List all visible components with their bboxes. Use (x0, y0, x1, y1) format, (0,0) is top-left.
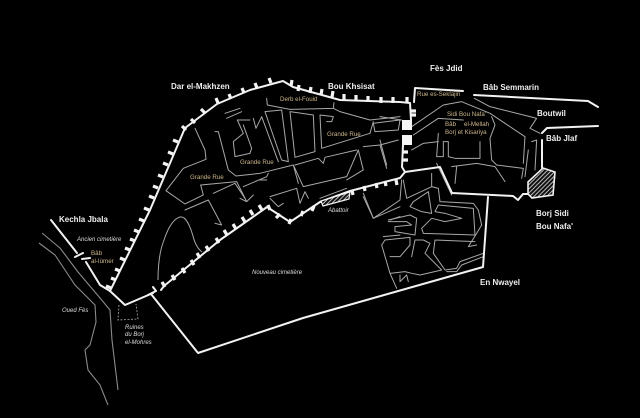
labels: places in italics (62, 208, 350, 346)
labels: districts and gates: Kechla Jbala (59, 215, 108, 224)
labels: places in italics: Ruines (125, 325, 144, 331)
labels: streets: Grande Rue (327, 131, 361, 138)
labels: places in italics: Ancien cimetière (76, 237, 122, 243)
labels: districts and gates: Bou Nafa' (536, 222, 573, 231)
labels: streets: Sidi Bou Nafa' (447, 111, 486, 118)
labels: districts and gates: Fès Jdid (430, 64, 463, 73)
rampart: crenellated south wall (162, 145, 405, 287)
gate: Bab Guissa white blocks (402, 120, 412, 145)
labels: places in italics: du Borj (125, 332, 145, 338)
labels: streets: Rue es-Seklajin (417, 91, 461, 98)
labels: streets: al-Iùmer (91, 258, 114, 265)
labels: streets (91, 91, 490, 265)
streets: south-east quarter (363, 173, 483, 288)
labels: streets: Grande Rue (240, 159, 274, 166)
labels: streets: Derb el-Fouid (280, 96, 318, 103)
labels: places in italics: el-Mohres (125, 340, 152, 346)
rampart: eastern wall and Bab Jlaf (405, 95, 598, 200)
labels: districts and gates: Borj Sidi (536, 209, 569, 218)
labels: places in italics: Oued Fès (62, 308, 88, 314)
street loop beside the north-west wall (158, 217, 202, 280)
streets: Fes Jdid quarter (380, 98, 540, 195)
labels: places in italics: Abattoir (327, 208, 350, 214)
labels: districts and gates: Bou Khsisat (328, 82, 375, 91)
ruins of Borj el-Mohres (118, 304, 138, 320)
labels: streets: el-Mellah (464, 121, 490, 128)
labels: streets: Bâb (91, 250, 103, 257)
outer wall: new cemetery enclosure (51, 197, 488, 353)
rampart: crenellated north wall (106, 78, 463, 291)
labels: streets: Borj et Kisariya (445, 129, 487, 136)
labels: streets: Bâb (445, 121, 457, 128)
labels: districts and gates: Boutwil (537, 109, 566, 118)
labels: districts and gates: Bâb Jlaf (546, 134, 577, 143)
labels: districts and gates: En Nwayel (480, 278, 520, 287)
tower: Borj Sidi Bou Nafa' (528, 168, 555, 198)
streets: west and central medina (166, 98, 400, 237)
labels: places in italics: Nouveau cimetière (252, 270, 303, 276)
labels: districts and gates: Dar el-Makhzen (171, 82, 230, 91)
abattoir building (321, 192, 350, 206)
labels: districts and gates (59, 64, 577, 287)
wall towers (106, 78, 416, 288)
river: Oued Fes (39, 233, 118, 405)
labels: streets: Grande Rue (190, 174, 224, 181)
labels: districts and gates: Bâb Semmarin (483, 83, 539, 92)
